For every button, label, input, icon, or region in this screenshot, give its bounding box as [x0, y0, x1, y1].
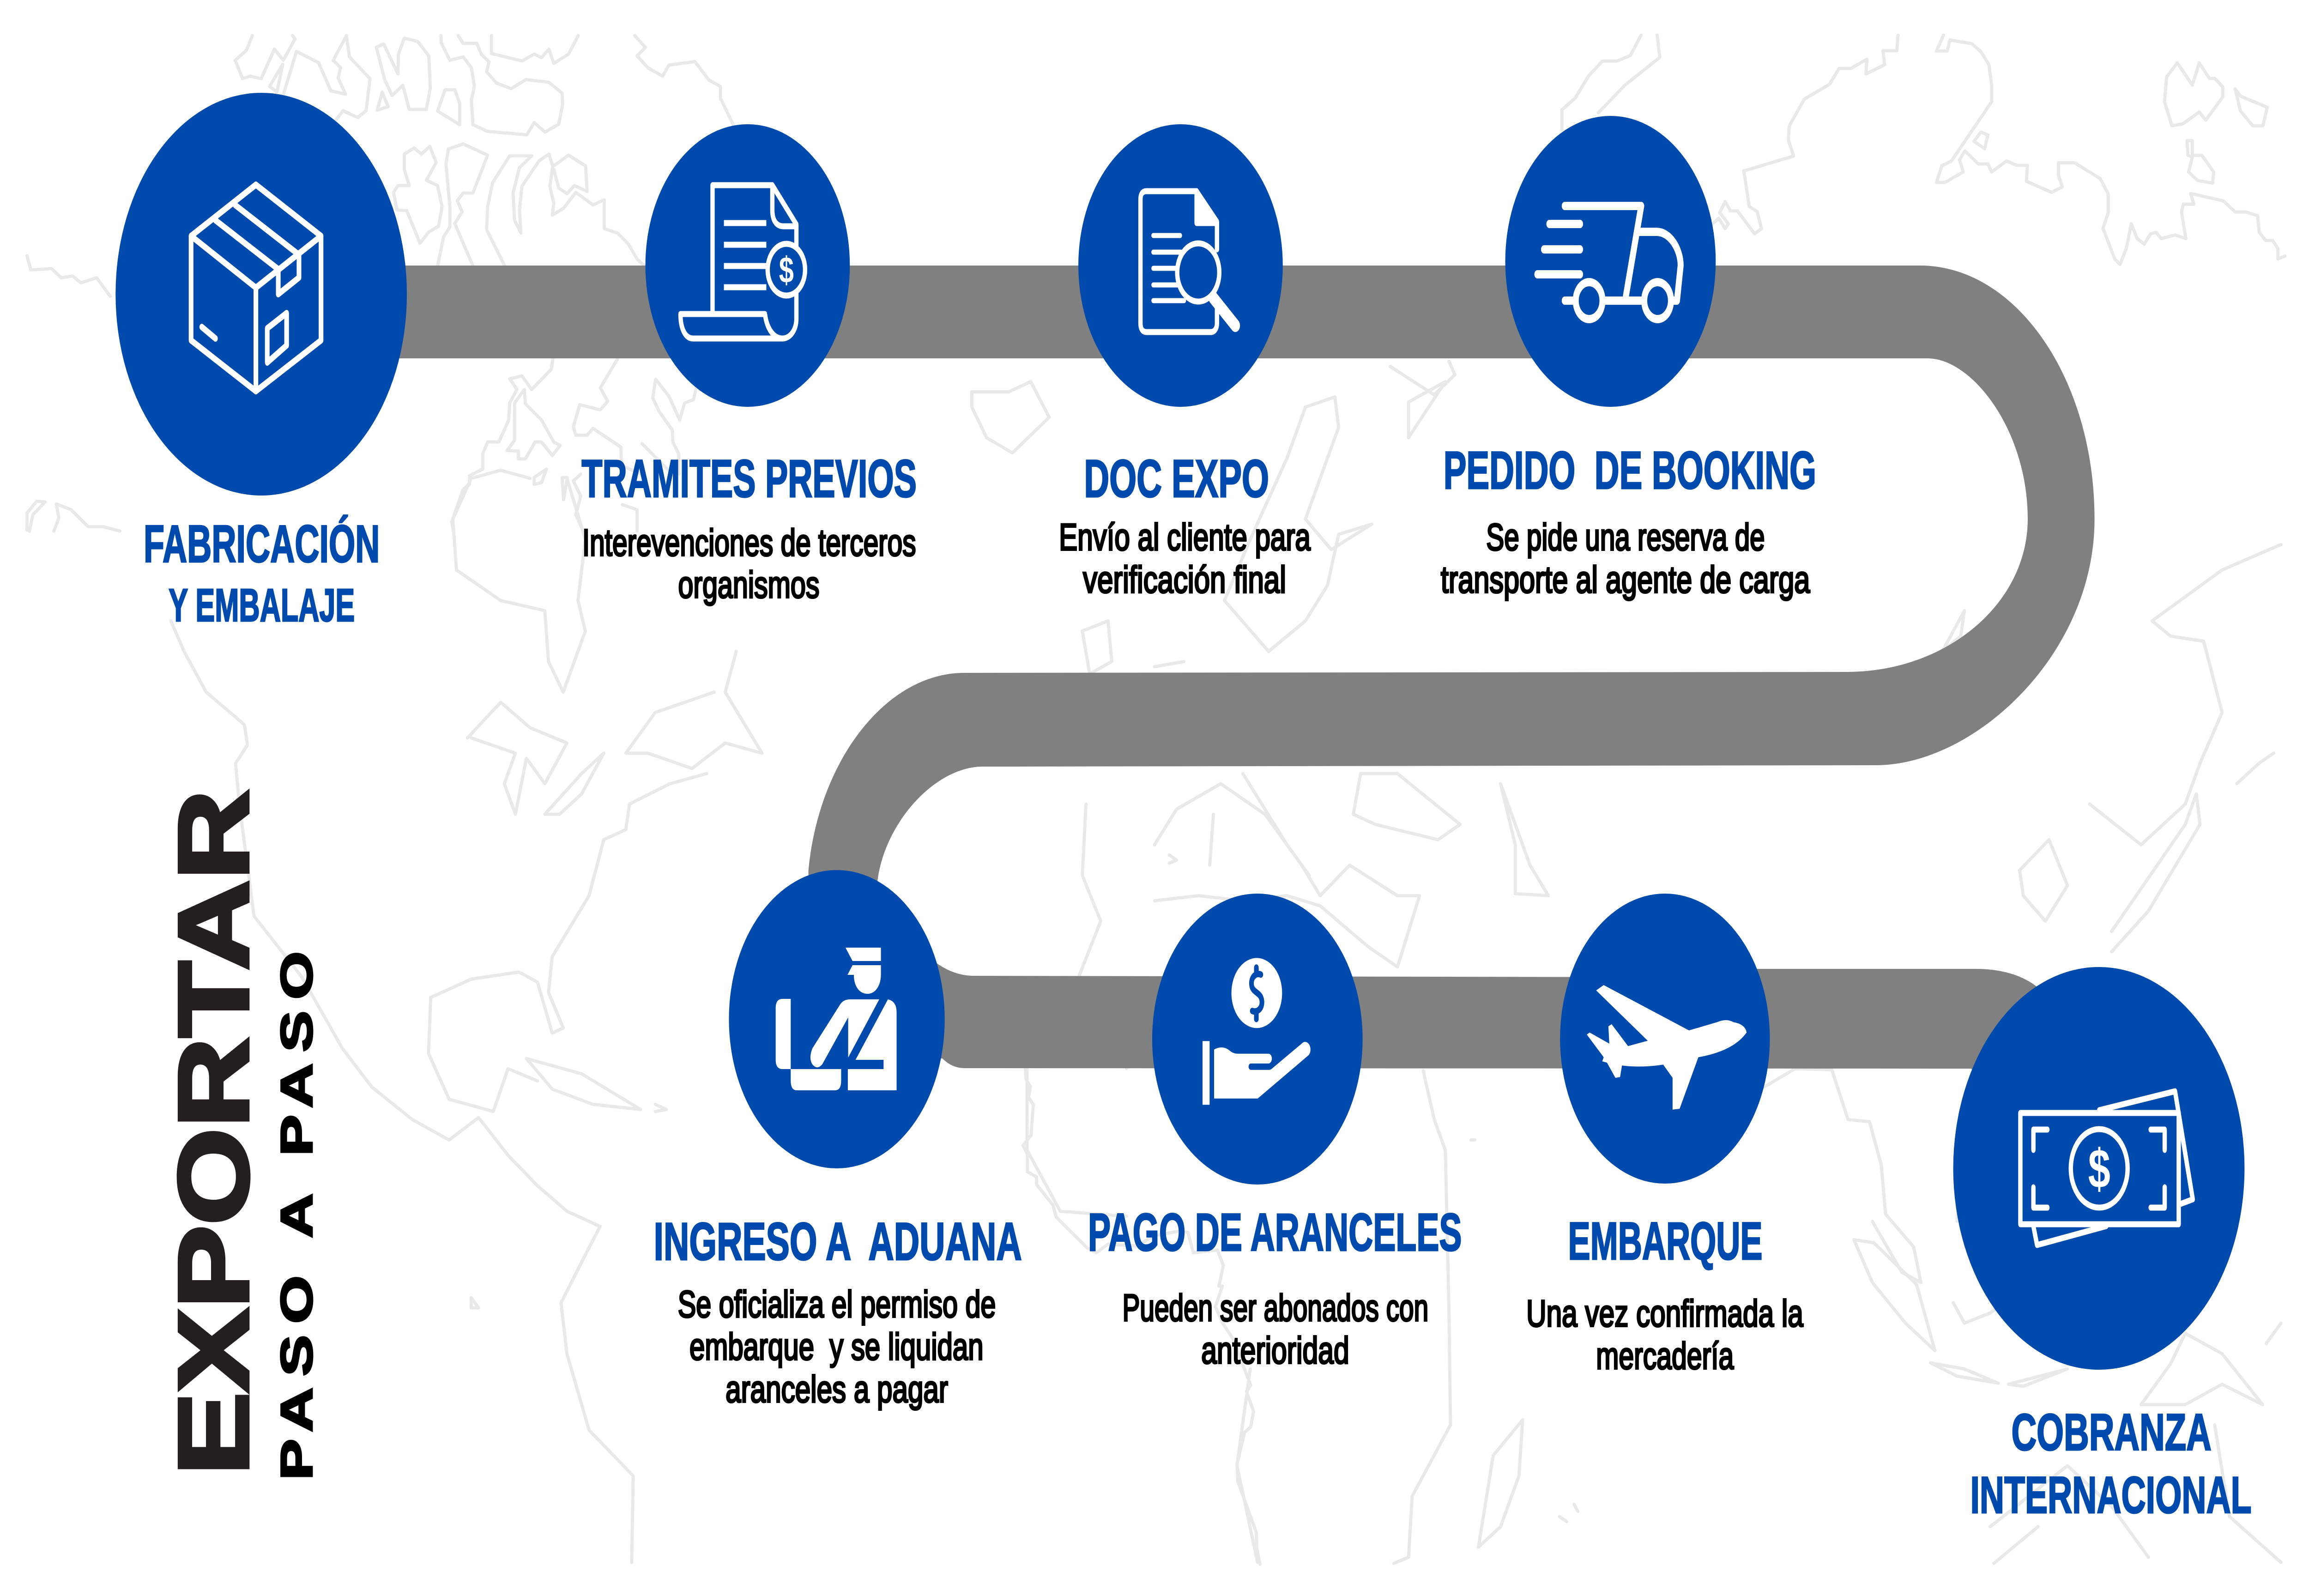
- heading: COBRANZA: [2011, 1403, 2212, 1461]
- step 2: trámites previos: [581, 124, 917, 606]
- step 8: cobranza internacional: [1953, 967, 2252, 1524]
- step 3: doc expo: [1059, 124, 1311, 601]
- winding road: upper section: [261, 266, 2095, 947]
- step 1: fabricación y embalaje: [115, 93, 407, 631]
- description: anterioridad: [1201, 1330, 1349, 1372]
- step 7: embarque: [1526, 894, 1803, 1377]
- circle: [646, 124, 850, 407]
- description: Pueden ser abonados con: [1123, 1287, 1428, 1329]
- heading: TRAMITES PREVIOS: [581, 449, 917, 508]
- step 5: ingreso a aduana: [654, 870, 1022, 1410]
- description: Una vez confirmada la: [1526, 1293, 1803, 1335]
- description: Envío al cliente para: [1059, 516, 1311, 558]
- circle: [1560, 894, 1770, 1184]
- heading: [144, 515, 380, 631]
- description: [1059, 516, 1311, 601]
- description: aranceles a pagar: [725, 1368, 948, 1410]
- description: transporte al agente de carga: [1441, 559, 1810, 601]
- heading: [1970, 1403, 2252, 1524]
- step 2: trámites previos: $: [779, 249, 794, 290]
- winding road: lower section: [835, 924, 2099, 1168]
- icon: cardboard box: [191, 185, 321, 391]
- circle: [115, 93, 407, 496]
- description: [582, 522, 916, 606]
- circle: [1078, 124, 1283, 407]
- icon: document with magnifier: [1141, 191, 1235, 332]
- heading: PAGO DE ARANCELES: [1088, 1203, 1462, 1262]
- step 8: cobranza internacional: $: [2088, 1138, 2110, 1200]
- description: Se pide una reserva de: [1486, 516, 1765, 558]
- step 6: pago de aranceles: [1088, 894, 1462, 1372]
- heading: FABRICACIÓN: [144, 515, 380, 574]
- title: exportar paso a paso: [158, 790, 321, 1480]
- heading: EMBARQUE: [1568, 1212, 1763, 1271]
- icon: airplane: [1587, 985, 1747, 1110]
- description: [1441, 516, 1810, 601]
- circle: [1953, 967, 2244, 1370]
- description: Se oficializa el permiso de: [678, 1283, 996, 1325]
- step 4: pedido de booking: [1441, 116, 1816, 601]
- title: exportar paso a paso: EXPORTAR: [158, 790, 269, 1475]
- circle: [1505, 116, 1716, 407]
- description: organismos: [678, 564, 819, 606]
- description: Interevenciones de terceros: [582, 522, 916, 564]
- heading: INTERNACIONAL: [1970, 1466, 2252, 1524]
- heading: Y EMBALAJE: [169, 580, 355, 631]
- description: [678, 1283, 996, 1410]
- circle: [729, 870, 945, 1168]
- icon: hand with coin: [1203, 958, 1311, 1105]
- description: embarque y se liquidan: [689, 1326, 984, 1368]
- icon: delivery truck: [1537, 206, 1680, 319]
- heading: PEDIDO DE BOOKING: [1444, 441, 1816, 500]
- description: verificación final: [1083, 559, 1286, 601]
- description: [1526, 1293, 1803, 1377]
- title: exportar paso a paso: PASO A PASO: [272, 951, 321, 1480]
- description: [1123, 1287, 1428, 1372]
- heading: INGRESO A ADUANA: [654, 1212, 1022, 1271]
- icon: document with coin: [681, 185, 805, 339]
- heading: DOC EXPO: [1084, 449, 1269, 508]
- description: mercadería: [1596, 1335, 1734, 1377]
- icon: banknotes: [2020, 1091, 2193, 1245]
- circle: [1152, 894, 1363, 1185]
- icon: customs officer: [776, 948, 897, 1090]
